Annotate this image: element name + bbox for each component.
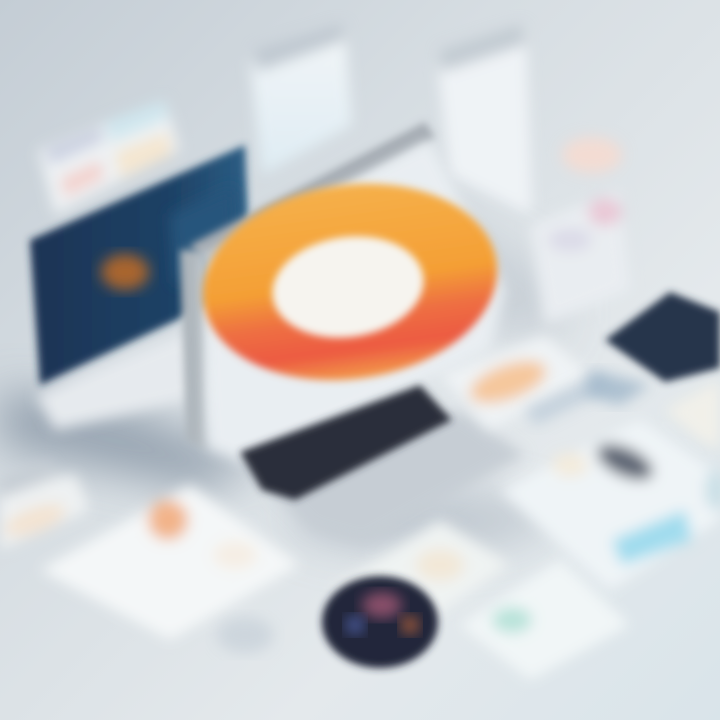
card: bottom left large — [40, 485, 300, 640]
stylus bar — [525, 375, 610, 425]
small card: centre right — [440, 335, 590, 430]
floor shadow sweep — [0, 200, 560, 550]
card: lower right with chips — [500, 420, 720, 590]
document card: top right — [438, 24, 532, 215]
monitor blue highlight — [170, 185, 238, 285]
monitor white base — [36, 330, 205, 430]
laptop top edge — [190, 122, 435, 262]
laptop: screen frame — [180, 122, 505, 462]
donut ring — [190, 165, 510, 399]
chips panel: right — [530, 137, 630, 325]
card: bottom centre — [330, 520, 510, 625]
monitor orange widget — [101, 254, 149, 290]
device pink segment — [362, 592, 402, 618]
laptop left edge — [180, 250, 207, 450]
dark round device — [322, 576, 438, 668]
card: bottom right — [460, 560, 630, 680]
small device: bottom centre left — [217, 617, 273, 653]
shadow below dark tablet — [585, 370, 650, 405]
laptop: silver base — [270, 410, 525, 545]
device: dark tablet right — [605, 292, 720, 382]
laptop screen — [203, 140, 505, 462]
card: left edge — [0, 462, 90, 550]
device orange segment — [401, 616, 419, 634]
device body — [322, 576, 438, 668]
card: far right — [665, 380, 720, 450]
laptop: dark keyboard — [240, 385, 452, 500]
device blue segment — [346, 616, 364, 634]
monitor: dark dashboard — [30, 145, 250, 430]
document card: top centre — [250, 24, 352, 175]
monitor screen — [30, 145, 250, 385]
document card: top left — [38, 100, 180, 215]
donut chart — [190, 165, 510, 399]
donut centre — [266, 227, 430, 347]
